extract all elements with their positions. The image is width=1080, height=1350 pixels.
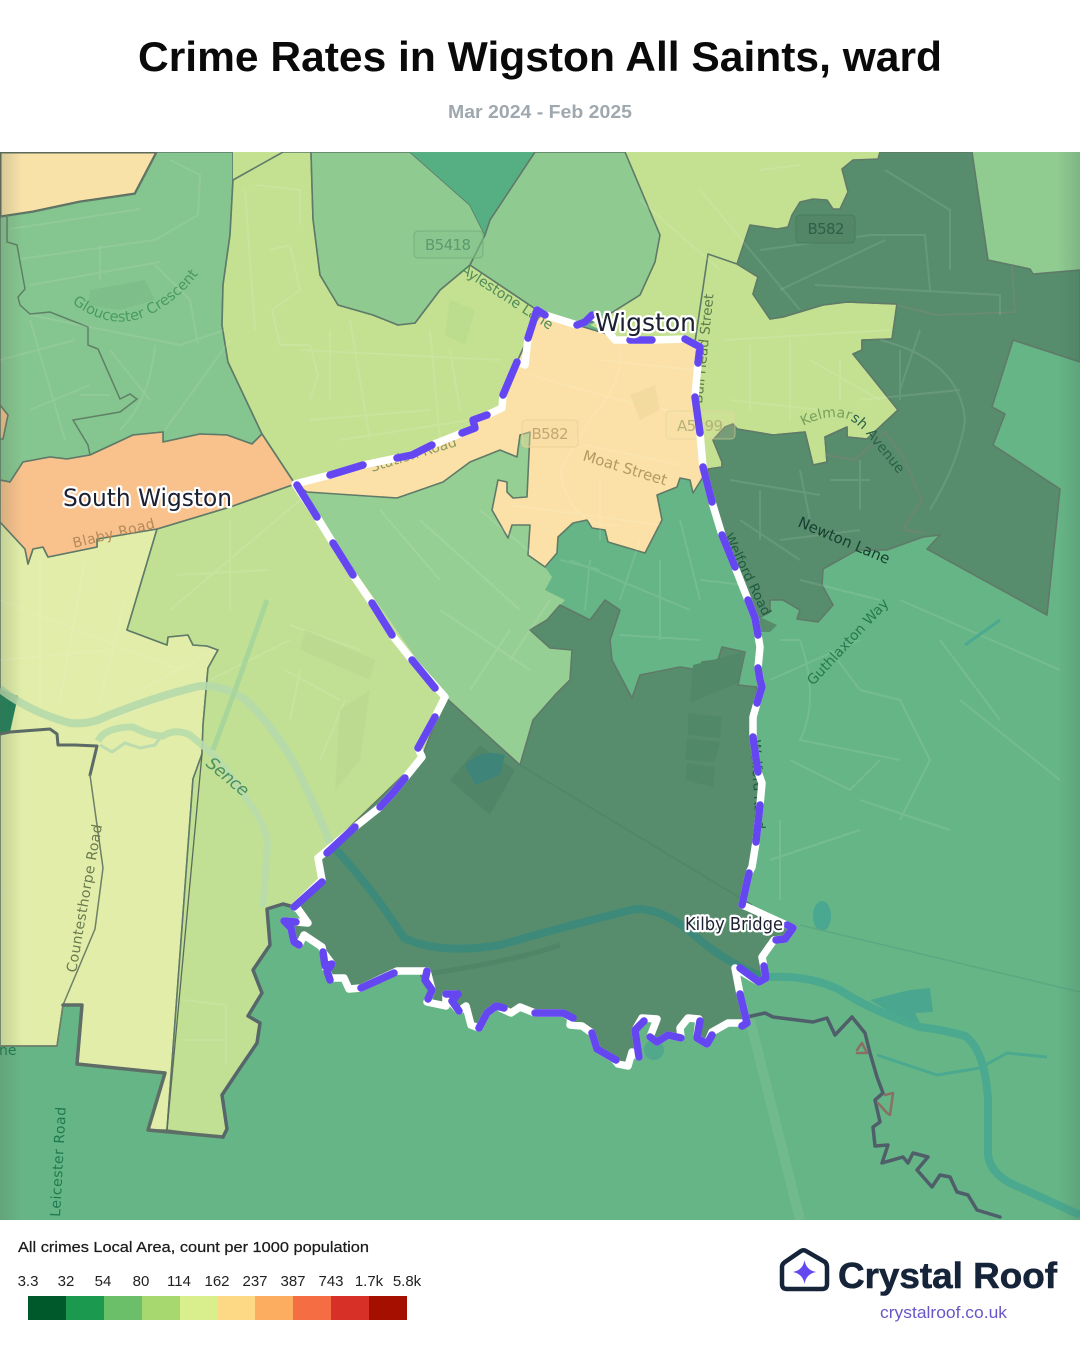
icon: house with star [782,1250,827,1289]
green spaces [305,402,1080,1220]
legend scale labels [18,1273,422,1290]
legend scale labels: 237 [242,1273,268,1290]
road labels: Gloucester Crescent [74,270,198,322]
legend scale labels: 114 [167,1273,191,1290]
road labels: Station Road [368,434,459,476]
logo: Crystal Roof [782,1250,1058,1322]
legend colour bar [28,1296,407,1320]
road labels: Countesthorpe Road [64,823,106,974]
legend title: All crimes Local Area, count per 1000 population [18,1239,369,1256]
street network [0,160,1060,1065]
legend scale labels: 162 [204,1273,230,1290]
road shields: B582 [532,425,568,443]
ward boundary: Wigston All Saints [284,310,793,1066]
road labels: Welford Road [747,739,768,830]
dark county boundary line [0,729,1000,1217]
place label: Kilby Bridge: Kilby Bridge [685,914,783,935]
road labels: Kelmarsh Avenue [800,408,902,473]
legend scale labels: 5.8k [393,1273,422,1290]
legend scale labels: 387 [280,1273,306,1290]
legend scale labels: 32 [58,1273,74,1290]
subtitle: date range: Mar 2024 - Feb 2025 [448,102,632,122]
choropleth regions [0,152,1080,1137]
place label: Wigston: Wigston [595,308,696,337]
website url: crystalroof.co.uk [880,1304,1008,1322]
river Sence [0,600,1080,1215]
legend scale labels: 3.3 [18,1273,38,1290]
map panel [0,152,1080,1220]
road shields: B582 [808,220,844,238]
place label: South Wigston: South Wigston [63,484,232,512]
map base area [0,322,1080,1220]
wordmark: Crystal Roof [838,1255,1058,1296]
left and right map edge shading [0,152,1080,1220]
legend [18,1239,422,1320]
road labels: Bull Head Street [690,293,718,404]
legend scale labels: 54 [95,1273,111,1290]
title: Crime Rates in Wigston All Saints, ward [138,33,942,80]
road labels: Sence [202,754,253,801]
road labels: Leicester Road [48,1107,70,1217]
road shields [414,215,855,447]
legend scale labels: 1.7k [355,1273,384,1290]
legend scale labels: 80 [133,1273,149,1290]
road shields: A5199 [677,417,723,435]
road labels: Moat Street [581,447,669,489]
road labels: Blaby Road [71,516,156,552]
ward sub-boundaries [7,217,1015,1130]
legend scale labels: 743 [318,1273,344,1290]
road labels: Newton Lane [795,513,893,568]
road labels: Aylestone Lane [458,262,556,333]
road labels: Guthlaxton Way [804,596,892,689]
road labels [0,266,902,1216]
road labels: Welford Road [720,531,774,618]
road shields: B5418 [425,236,471,254]
